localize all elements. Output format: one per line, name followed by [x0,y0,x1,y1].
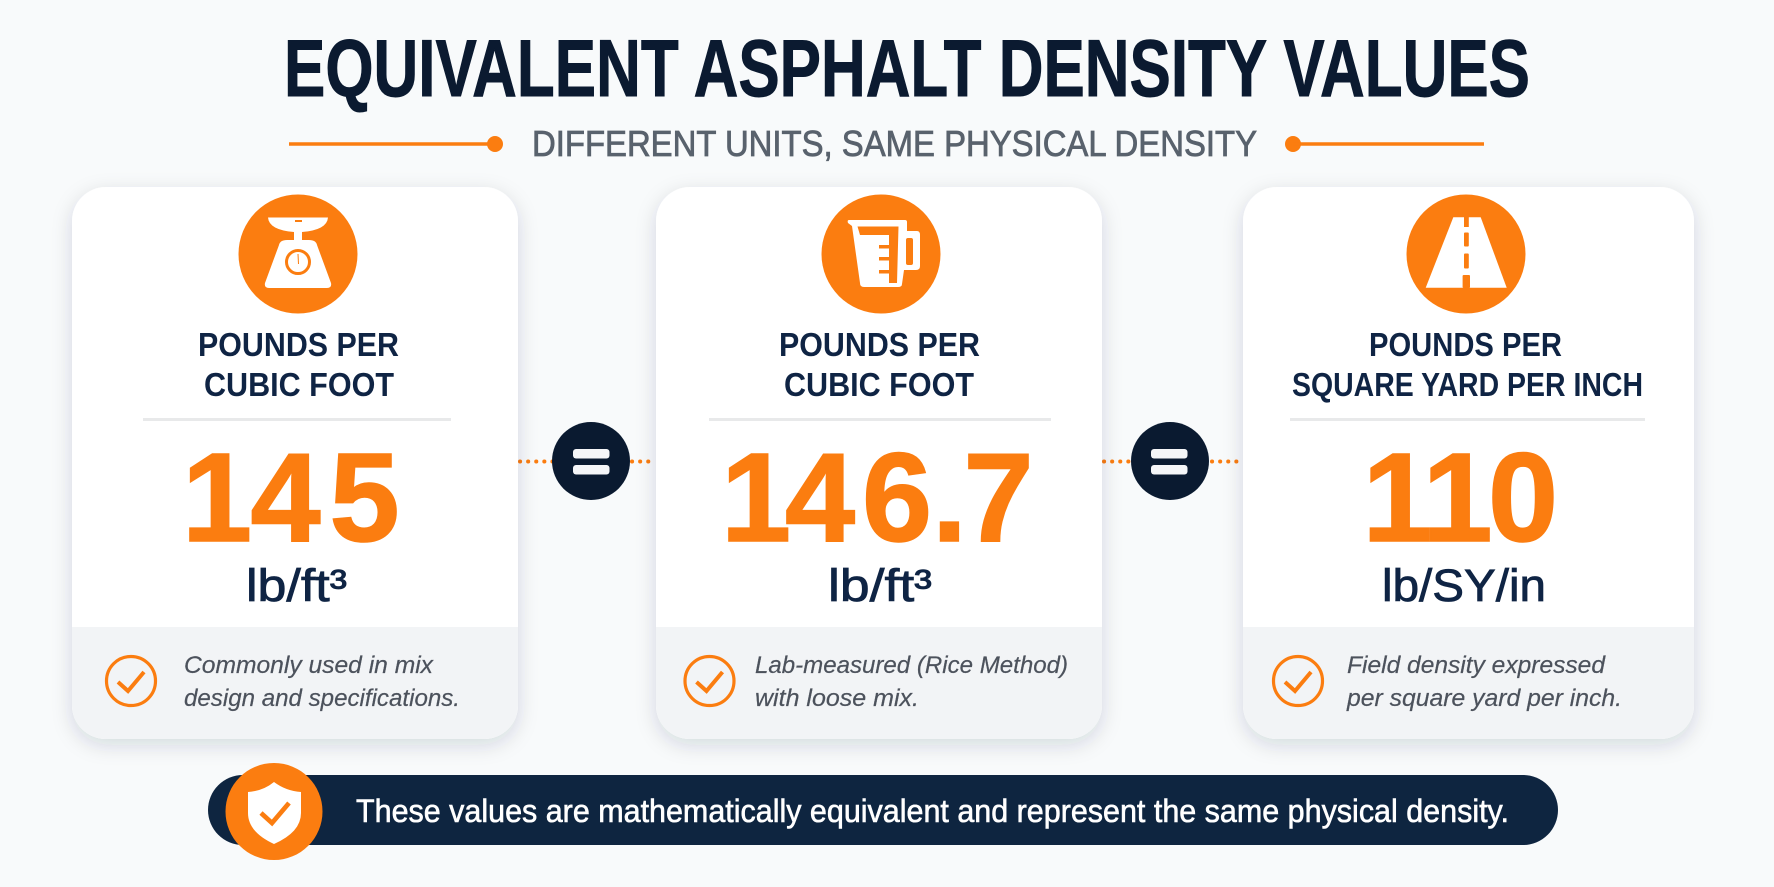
icon: check [1274,656,1322,706]
note: Commonly used in mix [184,652,434,679]
icon: road [1406,194,1526,314]
note: Lab-measured (Rice Method) [755,652,1068,679]
panel: pounds per cubic foot, 145 [72,187,518,739]
value: 145 [182,427,400,568]
subtitle with orange rules: DIFFERENT UNITS, SAME PHYSICAL DENSITY [532,123,1257,164]
heading: POUNDS PER [1369,327,1562,364]
icon: shield check [226,763,322,860]
note: per square yard per inch. [1346,685,1622,712]
unit: lb/ft³ [828,560,932,611]
icon: check [106,656,156,706]
heading: POUNDS PER [779,327,980,364]
note: design and specifications. [184,685,460,712]
heading [198,327,399,404]
heading: SQUARE YARD PER INCH [1292,367,1643,404]
subtitle with orange rules [289,123,1484,164]
value: 110 [1362,427,1558,568]
note: with loose mix. [755,685,919,712]
note [755,652,1068,712]
connector: second equals sign [1104,422,1243,500]
note: Field density expressed [1347,652,1606,679]
icon: check [685,656,734,706]
note [1346,652,1622,712]
unit: lb/SY/in [1382,560,1546,611]
callout text: These values are mathematically equivalent and represent the same physical density. [356,793,1509,829]
connector: first equals sign [520,422,656,500]
heading: POUNDS PER [198,327,399,364]
note [184,652,460,712]
value: 146.7 [721,427,1034,568]
icon: kitchen scale [238,194,358,314]
heading: CUBIC FOOT [784,367,974,404]
icon: measuring cup [822,194,940,314]
unit: lb/ft³ [246,560,347,611]
panel: pounds per cubic foot, 146.7 [656,187,1102,739]
callout banner [208,763,1558,860]
panel: pounds per square yard per inch, 110 [1243,187,1694,739]
heading: CUBIC FOOT [204,367,394,404]
heading [1292,327,1643,404]
heading [779,327,980,404]
